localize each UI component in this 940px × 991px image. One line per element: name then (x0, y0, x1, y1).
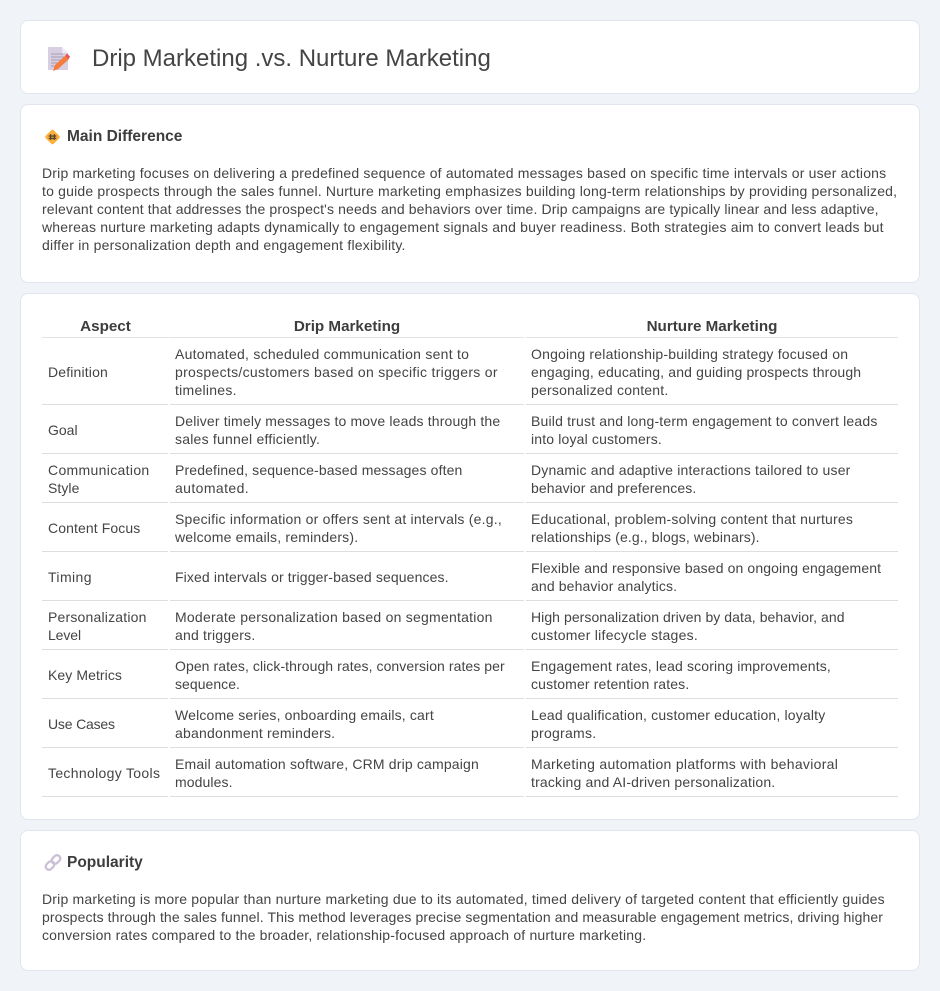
row: definition: engaging, educating, and guiding prospects through (531, 364, 861, 380)
panel: comparison table (20, 293, 920, 820)
row: definition: prospects/customers based on specific triggers or (175, 364, 498, 380)
row: goal: Goal (48, 422, 78, 438)
table header: nurture marketing (526, 317, 898, 338)
row: definition: Definition (48, 364, 108, 380)
table header: nurture marketing: Nurture Marketing (647, 318, 777, 335)
text: popularity paragraph: prospects through the sales funnel. This method leverages precise segmentation and measurable engagement metrics, driving higher (42, 909, 883, 925)
text: main difference paragraph: whereas nurture marketing adapts dynamically to engagement signals and buyer readiness. Both strategies aim to convert leads but (42, 219, 884, 235)
row: key metrics (42, 658, 898, 699)
icon: link (44, 854, 62, 871)
text: main difference paragraph: differ in personalization depth and engagement flexibility. (42, 237, 406, 253)
text: main difference paragraph (42, 165, 897, 253)
table header: aspect (42, 317, 169, 338)
icon: memo with pencil (48, 47, 70, 71)
panel: main difference (20, 104, 920, 283)
row: communication style: automated. (175, 480, 249, 496)
row: personalization level: Personalization (48, 608, 147, 624)
row: personalization level: Level (48, 626, 81, 642)
row: key metrics: customer retention rates. (531, 676, 689, 692)
row: key metrics: sequence. (175, 676, 240, 692)
text: popularity paragraph (42, 891, 885, 943)
row: key metrics: Engagement rates, lead scoring improvements, (531, 658, 831, 674)
row: goal: Deliver timely messages to move leads through the (175, 412, 500, 428)
row: communication style (42, 462, 898, 503)
row: content focus (42, 510, 898, 552)
header card (20, 20, 920, 94)
row: goal (42, 412, 898, 454)
text: popularity paragraph: conversion rates compared to the broader, relationship-focused approach of nurture marketing. (42, 927, 646, 943)
row: communication style: behavior and preferences. (531, 480, 696, 496)
row: content focus: Content Focus (48, 520, 140, 536)
row: definition: timelines. (175, 382, 237, 398)
row: personalization level: and triggers. (175, 626, 255, 642)
icon: diamond sign (45, 130, 60, 144)
row: use cases: Use Cases (48, 716, 115, 732)
table header: drip marketing: Drip Marketing (294, 318, 400, 335)
row: use cases: abandonment reminders. (175, 724, 335, 740)
row: use cases: Lead qualification, customer education, loyalty (531, 706, 825, 722)
row: personalization level: customer lifecycle stages. (531, 626, 698, 642)
text: main difference paragraph: relevant content that addresses the prospect's needs and behaviors over time. Drip campaigns are typically linear and less adaptive, (42, 201, 879, 217)
text: main difference paragraph: to guide prospects through the sales funnel. Nurture marketing emphasizes building long-term relationships by providing personalized, (42, 183, 897, 199)
row: communication style: Style (48, 480, 79, 496)
row: content focus: relationships (e.g., blogs, webinars). (531, 528, 760, 544)
heading: popularity: Popularity (67, 854, 143, 871)
text: main difference paragraph: Drip marketing focuses on delivering a predefined sequence of automated messages based on specific time intervals or user actions (42, 165, 886, 181)
row: timing: and behavior analytics. (531, 578, 677, 594)
table header: drip marketing (170, 317, 524, 338)
row: timing: Fixed intervals or trigger-based sequences. (175, 568, 449, 584)
row: definition (42, 346, 898, 405)
row: definition: Ongoing relationship-building strategy focused on (531, 346, 848, 362)
row: key metrics: Open rates, click-through rates, conversion rates per (175, 658, 505, 674)
row: content focus: Educational, problem-solving content that nurtures (531, 510, 853, 526)
heading: main difference: Main Difference (67, 128, 182, 145)
row: goal: into loyal customers. (531, 430, 662, 446)
title: Drip Marketing .vs. Nurture Marketing (92, 45, 491, 72)
row: content focus: welcome emails, reminders). (175, 528, 358, 544)
row: technology tools: Technology Tools (48, 764, 160, 780)
row: timing: Timing (48, 568, 92, 584)
row: personalization level (42, 608, 898, 650)
row: goal: Build trust and long-term engagement to convert leads (531, 412, 878, 428)
row: technology tools: modules. (175, 774, 233, 790)
row: content focus: Specific information or offers sent at intervals (e.g., (175, 510, 502, 526)
row: communication style: Communication (48, 462, 150, 478)
row: technology tools: Email automation software, CRM drip campaign (175, 756, 479, 772)
row: technology tools: tracking and AI-driven personalization. (531, 774, 775, 790)
panel: popularity (20, 830, 920, 971)
row: personalization level: Moderate personalization based on segmentation (175, 608, 493, 624)
row: personalization level: High personalization driven by data, behavior, and (531, 608, 845, 624)
row: key metrics: Key Metrics (48, 666, 122, 682)
row: use cases (42, 706, 898, 748)
row: timing (42, 560, 898, 601)
table header: aspect: Aspect (80, 318, 131, 335)
row: timing: Flexible and responsive based on ongoing engagement (531, 560, 881, 576)
row: goal: sales funnel efficiently. (175, 430, 320, 446)
row: communication style: Dynamic and adaptive interactions tailored to user (531, 462, 851, 478)
row: definition: personalized content. (531, 382, 668, 398)
row: technology tools: Marketing automation platforms with behavioral (531, 756, 838, 772)
row: communication style: Predefined, sequence-based messages often (175, 462, 462, 478)
row: technology tools (42, 756, 898, 797)
row: use cases: programs. (531, 724, 596, 740)
row: definition: Automated, scheduled communication sent to (175, 346, 469, 362)
row: use cases: Welcome series, onboarding emails, cart (175, 706, 434, 722)
text: popularity paragraph: Drip marketing is more popular than nurture marketing due to its automated, timed delivery of targeted content that efficiently guides (42, 891, 885, 907)
